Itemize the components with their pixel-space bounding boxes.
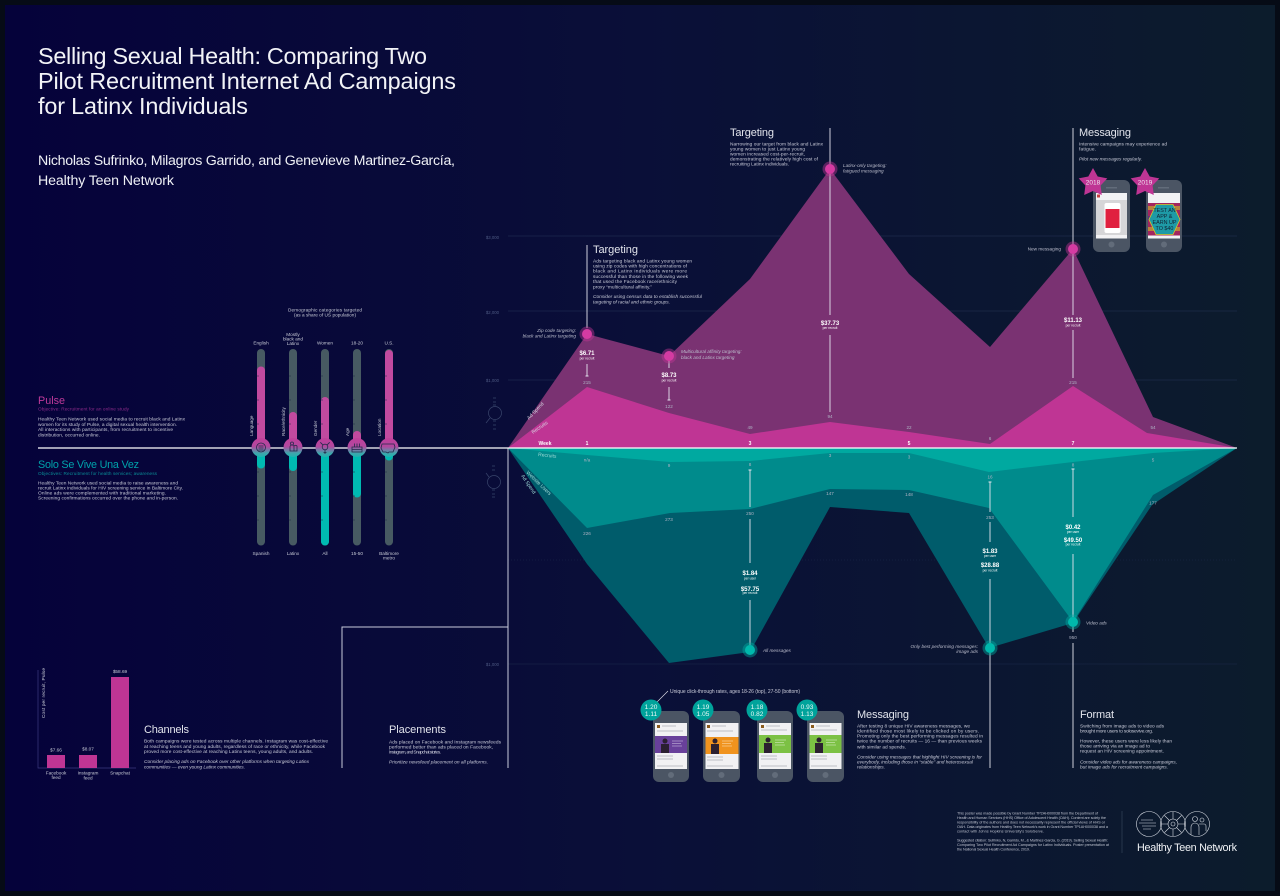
bar chart: cost per recruit: $8.07 [82,746,94,752]
badges: click-through rates: 1.20 [645,704,658,711]
authors [38,153,455,189]
badges: click-through rates: 0.93 [801,704,814,711]
panel: Targeting week 1: black and Latinx individuals were more [593,268,687,274]
note: click-through rates [657,689,800,702]
cost labels: per recruit [662,378,677,382]
axis scale labels: $2,000 [486,310,500,315]
cost labels: per recruit [580,356,595,360]
caption: demographic categories: (as a share of US population) [294,312,356,318]
panel: Channels: communities — even young Latinx communities. [144,764,245,770]
footer: funding and citation: the National Sexual Health Conference, 2019. [957,848,1030,852]
data values: 8 [1072,462,1075,468]
bar chart: cost per recruit: feed [83,776,93,780]
milestone annotations: fatigued messaging [843,168,884,174]
data values: 8 [749,462,752,467]
star badge: 2019: 2019 [1138,180,1153,186]
milestone annotations: Multicultural affinity targeting: [681,349,742,354]
data values: 3 [908,454,911,460]
phone: 2019 ad: APP & [1157,214,1173,220]
cost labels: per recruit [1066,324,1081,328]
panel: Messaging week 7: fatigue. [1079,146,1096,152]
footer: funding and citation: Suggested citation: Sufrinko, N, Garrido, M., & Martinez-Garcia, G. (2019). Selling Sexual Health: [957,838,1108,842]
slider labels top [253,332,394,346]
panel: Targeting week 4: Targeting [730,127,774,139]
series labels: Recruits [538,452,557,460]
data values: 9 [668,463,671,468]
series labels: Ad Spend [519,474,537,496]
axis scale labels: $3,000 [486,235,500,240]
panel: Format [1080,709,1177,770]
footer: funding and citation: contact with Johns Hopkins University's SoloServe. [957,830,1044,834]
panel: Pulse intro: All interactions with participants, from recruitment to incentive [38,427,173,433]
footer: funding and citation: responsibility of the authors and does not necessarily represent the official views of HHS or [957,820,1106,824]
cost labels: $6.71 [579,351,595,357]
main axis line [38,447,1237,449]
panel: Channels: Both campaigns were tested across multiple channels. Instagram was cost-effective [144,738,328,744]
panel: Messaging lower: everybody, including those in “stable” and heterosexual [857,760,974,766]
logo: Healthy Teen Network [1136,812,1238,854]
slider labels top: English [253,340,269,346]
panel: Pulse intro: Objective: Recruitment for an online study [38,406,130,412]
slider labels top: black and [283,336,303,342]
data values: 3 [829,453,832,458]
phone: message ad 4 [807,711,844,782]
panel: Messaging week 7 [1079,127,1167,162]
data values: 250 [746,511,754,516]
footer: funding and citation: Health and Human Services (HHS) Office of Adolescent Health (OAH). Content are solely the [957,816,1106,820]
title: Pilot Recruitment Internet Ad Campaigns [38,68,456,94]
phone: 2018 ad [1093,180,1130,252]
data values [583,380,1157,640]
panel: Pulse intro: women for its study of Pulse, a digital sexual health intervention. [38,422,177,428]
badges: click-through rates: 1.13 [801,711,814,718]
cost labels: per recruit [743,591,758,595]
panel: Messaging lower: Consider using messages that highlight HIV screening is for [857,754,982,760]
milestone annotations: All messages [762,648,792,653]
panel: Solo Se Vive Una Vez intro: Objectives: Recruitment for health services; awareness [38,471,158,476]
panel: Pulse intro [38,395,186,438]
cost labels: per user [984,554,997,558]
slider labels top: U.S. [384,340,394,346]
bar chart: cost per recruit: Facebook [46,770,67,776]
slider category labels: Gender [313,420,318,436]
bar chart: cost per recruit: Instagram [78,770,99,776]
slider category labels: Language [249,415,254,436]
data values: n/a [584,458,591,462]
milestone annotations: Only best performing messages: [911,644,979,649]
panel: Placements: Ads placed on Facebook and Instagram newsfeeds [389,740,502,746]
panel: Placements: Placements [389,724,446,736]
series labels: Website Users [525,470,552,497]
title: for Latinx Individuals [38,93,248,119]
data values: 253 [986,515,994,520]
divider: footer [1121,811,1123,853]
slider labels bottom: 15-50 [351,551,363,556]
panel: Messaging lower: Promoting only the best performing messages resulted in [857,734,983,740]
cost labels: $0.42 [1065,525,1081,531]
panel: Solo Se Vive Una Vez intro [38,459,183,502]
frame lines: placements [342,448,508,768]
slider category labels: Age [345,427,350,436]
data values: 177 [1149,500,1157,506]
panel: Format: brought more users to solosevive.org. [1080,728,1153,734]
panel: Messaging lower: relationships. [857,764,885,770]
slider chart: demographics [257,349,393,546]
area: Pulse recruits [508,386,1237,448]
panel: Channels [144,724,328,770]
panel: Pulse intro: Pulse [38,395,65,407]
milestone annotations [523,163,1107,654]
data values: 16 [987,474,993,480]
footer: funding and citation [957,812,1110,852]
bar chart: cost per recruit: feed [51,775,61,780]
panel: Format: Switching from image ads to video ads [1080,724,1165,730]
week labels: 5 [908,441,911,447]
panel: Messaging lower: with similar ad spends. [857,744,906,750]
data values: 226 [583,531,591,536]
star badge: 2019 [1131,168,1159,195]
phone: 2019 ad: EARN UP [1153,220,1177,226]
data values: 273 [665,517,673,522]
panel: Placements: performed better than ads placed on Facebook, [389,744,493,750]
slider category labels [249,406,382,436]
icon: magnifier upper [486,398,502,429]
area: Solo recruits [508,448,1237,472]
panel: Messaging lower: identified those most likely to be clicked on by users. [857,728,979,734]
slider category labels: Location [377,418,382,436]
badges: click-through rates: 1.19 [697,704,710,711]
data values: 6 [989,436,992,441]
panel: Solo Se Vive Una Vez intro: Online ads were complemented with traditional marketing. [38,490,166,496]
panel: Messaging lower [857,709,983,770]
milestone annotations: image ads [956,649,979,654]
slider labels bottom: Spanish [253,551,270,556]
area: Solo website users [508,448,1237,622]
slider labels bottom: Latinx [287,551,300,556]
axis scale labels: $1,000 [486,378,500,383]
title: Selling Sexual Health: Comparing Two [38,43,427,69]
data values: 49 [747,425,753,430]
series labels [519,401,557,497]
milestone annotations: black and Latinx targeting [681,355,735,360]
panel: Solo Se Vive Una Vez intro: Screening confirmations occurred over the phone and in-person. [38,496,178,502]
week labels: 7 [1072,441,1075,447]
data values: 94 [827,414,833,419]
cost labels: $1.84 [742,571,758,577]
data values: 215 [1069,380,1077,385]
milestone annotations: Latinx-only targeting: [843,163,887,168]
badges: click-through rates: 1.05 [697,711,710,718]
area: Solo ad spend [508,448,1237,663]
panel: Targeting week 4: Narrowing our target from black and Latinx [730,142,824,148]
slider labels top: Women [317,340,333,346]
panel: Solo Se Vive Una Vez intro: Solo Se Vive Una Vez [38,459,139,471]
panel: Solo Se Vive Una Vez intro: Healthy Teen Network used social media to raise awareness and [38,480,178,486]
panel: Targeting week 1: successful than those in the following week [593,274,689,280]
data values: 122 [665,404,673,409]
panel: Targeting week 1: Consider using census data to establish successful [593,294,703,300]
slider labels bottom: Baltimore [379,551,399,556]
caption: demographic categories [288,308,362,318]
slider labels bottom [253,551,399,560]
footer: funding and citation: Comparing Two Pilot Recruitment Ad Campaigns for Latinx Individuals. Poster presentation at [957,843,1110,847]
bar chart: cost per recruit: $58.69 [113,669,128,674]
cost labels: $37.73 [821,321,840,327]
cost labels [579,318,1083,595]
authors: Nicholas Sufrinko, Milagros Garrido, and Genevieve Martinez-García, [38,153,455,169]
star badge: 2018 [1079,168,1107,195]
phone: message ad 2 [703,711,740,782]
data values: 22 [906,425,912,430]
slider labels top: Latinx [287,341,300,346]
bar chart: cost per recruit: Snapchat [110,770,131,776]
footer: funding and citation: This poster was made possible by Grant Number TP2AH000038 from the Department of [957,812,1099,816]
phone: message ad 1 [653,711,689,782]
panel: Placements: Prioritize newsfeed placement on all platforms. [389,760,488,766]
panel: Targeting week 1: using zip codes with high concentrations of [593,264,688,270]
icon: magnifier lower [486,466,500,497]
panel: Messaging week 7: Pilot new messages regularly. [1079,156,1142,162]
logo: Healthy Teen Network: Healthy Teen Network [1137,842,1238,854]
panel: Placements: Instagram, and Snapchat stories. [389,750,441,756]
week labels: Week [539,441,552,447]
bar chart: cost per recruit: Cost per recruit, Pulse [41,668,47,718]
chart grid lines [508,236,1237,664]
bar chart: cost per recruit [38,668,136,780]
cost labels: per user [1067,530,1080,534]
cost labels: $57.75 [741,587,760,593]
cost labels: per recruit [983,568,998,572]
callout lines [586,128,1074,768]
slider knobs with icons [252,438,398,457]
milestone annotations: New messaging [1028,246,1061,252]
data values: 147 [826,491,834,496]
panel: Targeting week 4: recruiting Latinx individuals. [730,162,789,168]
panel: Targeting week 4 [730,127,824,168]
panel: Format: request an HIV screening appointment. [1080,748,1164,754]
panel: Channels: at reaching teens and young adults, regardless of race or ethnicity, while Facebook [144,744,326,750]
cost labels: $11.13 [1064,318,1083,324]
panel: Pulse intro: Healthy Teen Network used social media to recruit black and Latinx [38,416,186,422]
caption: demographic categories: Demographic categories targeted [288,308,362,312]
slider labels bottom: metro [383,556,395,560]
badges: click-through rates: 1.11 [645,711,657,718]
cost labels: $49.50 [1064,538,1083,544]
cost labels: $28.88 [981,563,1000,569]
panel: Targeting week 4: women increased cost-per-recruit, [730,152,805,158]
panel: Targeting week 4: young women to just Latinx young [730,146,805,152]
star badge: 2018: 2018 [1086,180,1101,186]
panel: Format: Format [1080,709,1114,721]
panel: Targeting week 1: proxy “multicultural affinity.” [593,284,652,290]
data values: 215 [583,380,591,385]
cost labels: per recruit [1066,542,1081,546]
panel: Targeting week 1: that used the Facebook race/ethnicity [593,279,678,285]
panel: Targeting week 1 [593,244,703,306]
slider labels bottom: All [322,551,328,556]
authors: Healthy Teen Network [38,173,175,189]
footer: funding and citation: OAH. Data originates from Healthy Teen Network's work in Grant Number TP1AH000038 and a [957,825,1109,829]
panel: Format: Consider video ads for awareness campaigns, [1080,760,1177,766]
milestone annotations: black and Latinx targeting [523,334,576,338]
badges: click-through rates [640,700,818,720]
phone: 2019 ad [1146,180,1182,252]
panel: Messaging week 7: Messaging [1079,127,1131,139]
week labels: 1 [586,441,589,447]
phone: 2019 ad: TO $40 [1156,226,1173,232]
cost labels: per user [744,576,757,580]
slider category labels: Race/ethnicity [281,406,286,436]
phone: 2019 ad: TEST AN [1153,208,1176,214]
series labels: Recruits [531,420,550,436]
data values: 54 [1150,425,1156,430]
axis scale labels [486,235,500,667]
panel: Pulse intro: distribution, occurred online. [38,432,100,438]
series labels: Ad Spend [526,401,546,421]
panel: Channels: Channels [144,724,190,736]
cost labels: $8.73 [661,373,677,379]
bar chart: cost per recruit: $7.66 [50,748,62,752]
cost labels: per recruit [823,326,838,330]
panel: Messaging week 7: Intensive campaigns may experience ad [1079,142,1167,148]
panel: Messaging lower: Messaging [857,709,909,721]
panel: Channels: proved more cost-effective at reaching Latinx teens, young adults, and adults. [144,749,313,755]
data values: 148 [905,492,913,497]
panel: Channels: Consider placing ads on Facebook over other platforms when targeting Latinx [144,759,310,765]
axis scale labels: $1,000 [486,662,500,667]
slider labels top: Mostly [286,332,300,337]
phone: message ad 3 [757,711,793,782]
panel: Format: However, these users were less likely than [1080,738,1172,744]
badges: click-through rates: 0.82 [751,711,764,718]
panel: Targeting week 1: targeting of racial and ethnic groups. [593,300,670,306]
title [38,43,456,119]
markers: Pulse milestones [580,162,1080,364]
markers: Solo milestones [742,614,1080,658]
data values: 950 [1069,635,1077,640]
panel: Messaging lower: twice the number of recruits — 16 — than previous weeks [857,738,983,744]
data values: 5 [1152,458,1155,462]
area: Pulse ad spend [508,169,1237,448]
panel: Placements [389,724,502,766]
week labels [539,441,1075,447]
milestone annotations: Zip code targeting: [536,328,577,333]
panel: Format: those arriving via an image ad to [1080,744,1150,750]
slider labels top: 18-20 [351,340,363,346]
panel: Targeting week 1: Targeting [593,244,638,256]
panel: Format: but image ads for recruitment campaigns. [1080,764,1168,770]
badges: click-through rates: 1.18 [751,704,764,711]
panel: Targeting week 1: Ads targeting black and Latinx young women [593,258,692,264]
panel: Solo Se Vive Una Vez intro: recruit Latinx individuals for HIV screening service in Baltimore City. [38,486,183,492]
milestone annotations: Video ads [1086,620,1107,626]
week labels: 3 [749,441,752,447]
note: click-through rates: Unique click-through rates, ages 18-26 (top), 27-50 (bottom) [670,689,800,695]
panel: Messaging lower: After testing 8 unique HIV awareness messages, we [857,724,970,730]
panel: Targeting week 4: demonstrating the relatively high cost of [730,156,819,162]
cost labels: $1.83 [982,549,998,555]
